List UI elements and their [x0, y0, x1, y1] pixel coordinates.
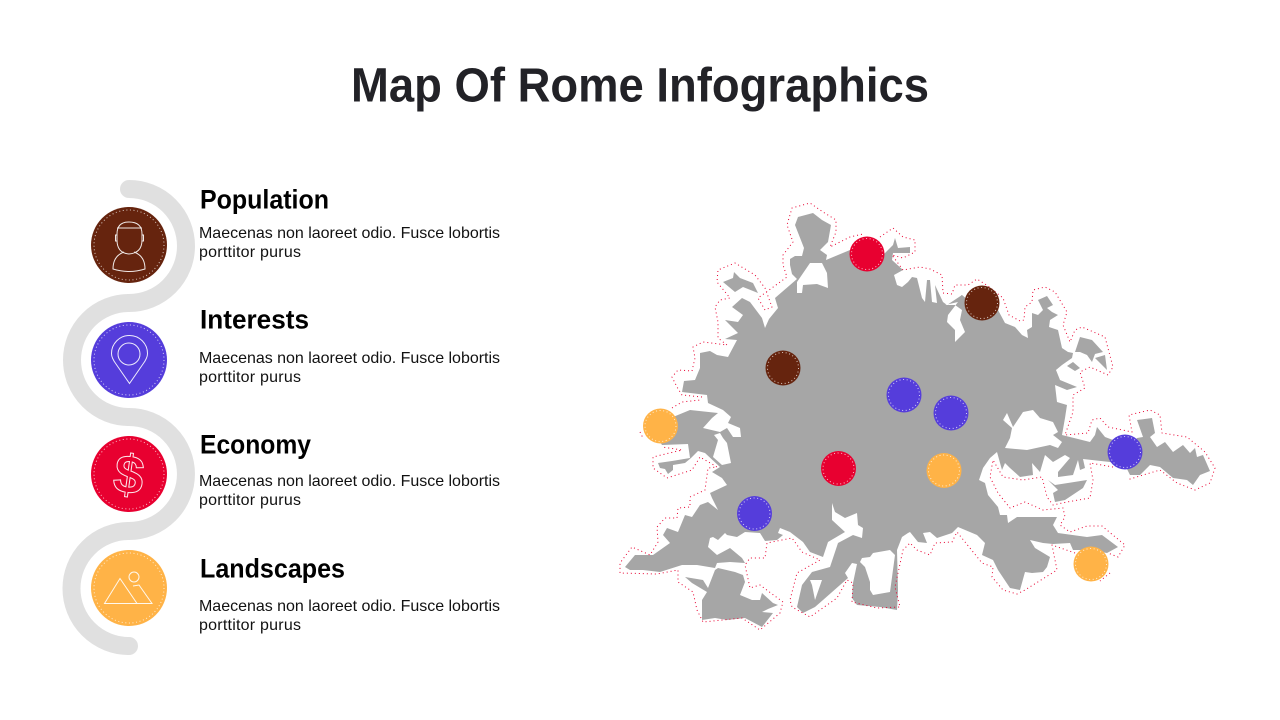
marker: purple southwest: [737, 496, 772, 531]
heading: economy: Economy: [200, 430, 311, 460]
icon: map pin: [91, 322, 167, 398]
text: population description: [199, 225, 500, 261]
panel: interests: [91, 304, 500, 398]
marker: yellow west: [643, 408, 678, 444]
marker: brown northwest: [766, 350, 800, 386]
heading: landscapes: Landscapes: [200, 554, 345, 584]
island: southeast: [1048, 480, 1087, 502]
map of Rome: [620, 203, 1215, 630]
text: interests description: Maecenas non laoreet odio. Fusce lobortis: [199, 350, 500, 367]
marker: red north: [850, 236, 884, 272]
icon: person: [91, 207, 167, 283]
text: landscapes description: Maecenas non laoreet odio. Fusce lobortis: [199, 598, 500, 615]
title: Map Of Rome Infographics: [351, 60, 929, 112]
icon: mountains: [91, 550, 167, 626]
heading: interests: Interests: [200, 304, 309, 334]
marker: yellow southeast: [1074, 546, 1108, 582]
heading: population: Population: [200, 184, 329, 214]
marker: brown northeast: [964, 286, 1000, 320]
marker: purple center: [886, 378, 922, 412]
panel: economy: [91, 430, 500, 512]
map landmass: [625, 213, 1210, 627]
serpentine connector: [71, 189, 186, 646]
island: northeast: [1067, 337, 1107, 371]
island: southwest: [685, 568, 778, 627]
text: landscapes description: [199, 598, 500, 634]
panel: landscapes: [91, 550, 500, 634]
panel: population: [91, 184, 500, 283]
text: economy description: Maecenas non laoreet odio. Fusce lobortis: [199, 473, 500, 490]
text: population description: Maecenas non laoreet odio. Fusce lobortis: [199, 225, 500, 242]
dotted outline: [620, 203, 1215, 630]
marker: purple center right: [934, 396, 968, 430]
map inlets: [713, 263, 1075, 600]
marker: red center: [821, 451, 856, 486]
text: population description: porttitor purus: [199, 244, 301, 261]
text: landscapes description: porttitor purus: [199, 617, 301, 634]
marker: yellow center: [926, 453, 962, 488]
marker: purple east: [1108, 434, 1142, 470]
text: economy description: porttitor purus: [199, 492, 301, 509]
icon: dollar: [91, 436, 167, 512]
text: interests description: porttitor purus: [199, 369, 301, 386]
island: north of inlet: [961, 295, 966, 310]
island: northwest: [723, 272, 758, 293]
text: economy description: [199, 473, 500, 509]
text: interests description: [199, 350, 500, 386]
icon: dollar: $: [110, 443, 148, 507]
